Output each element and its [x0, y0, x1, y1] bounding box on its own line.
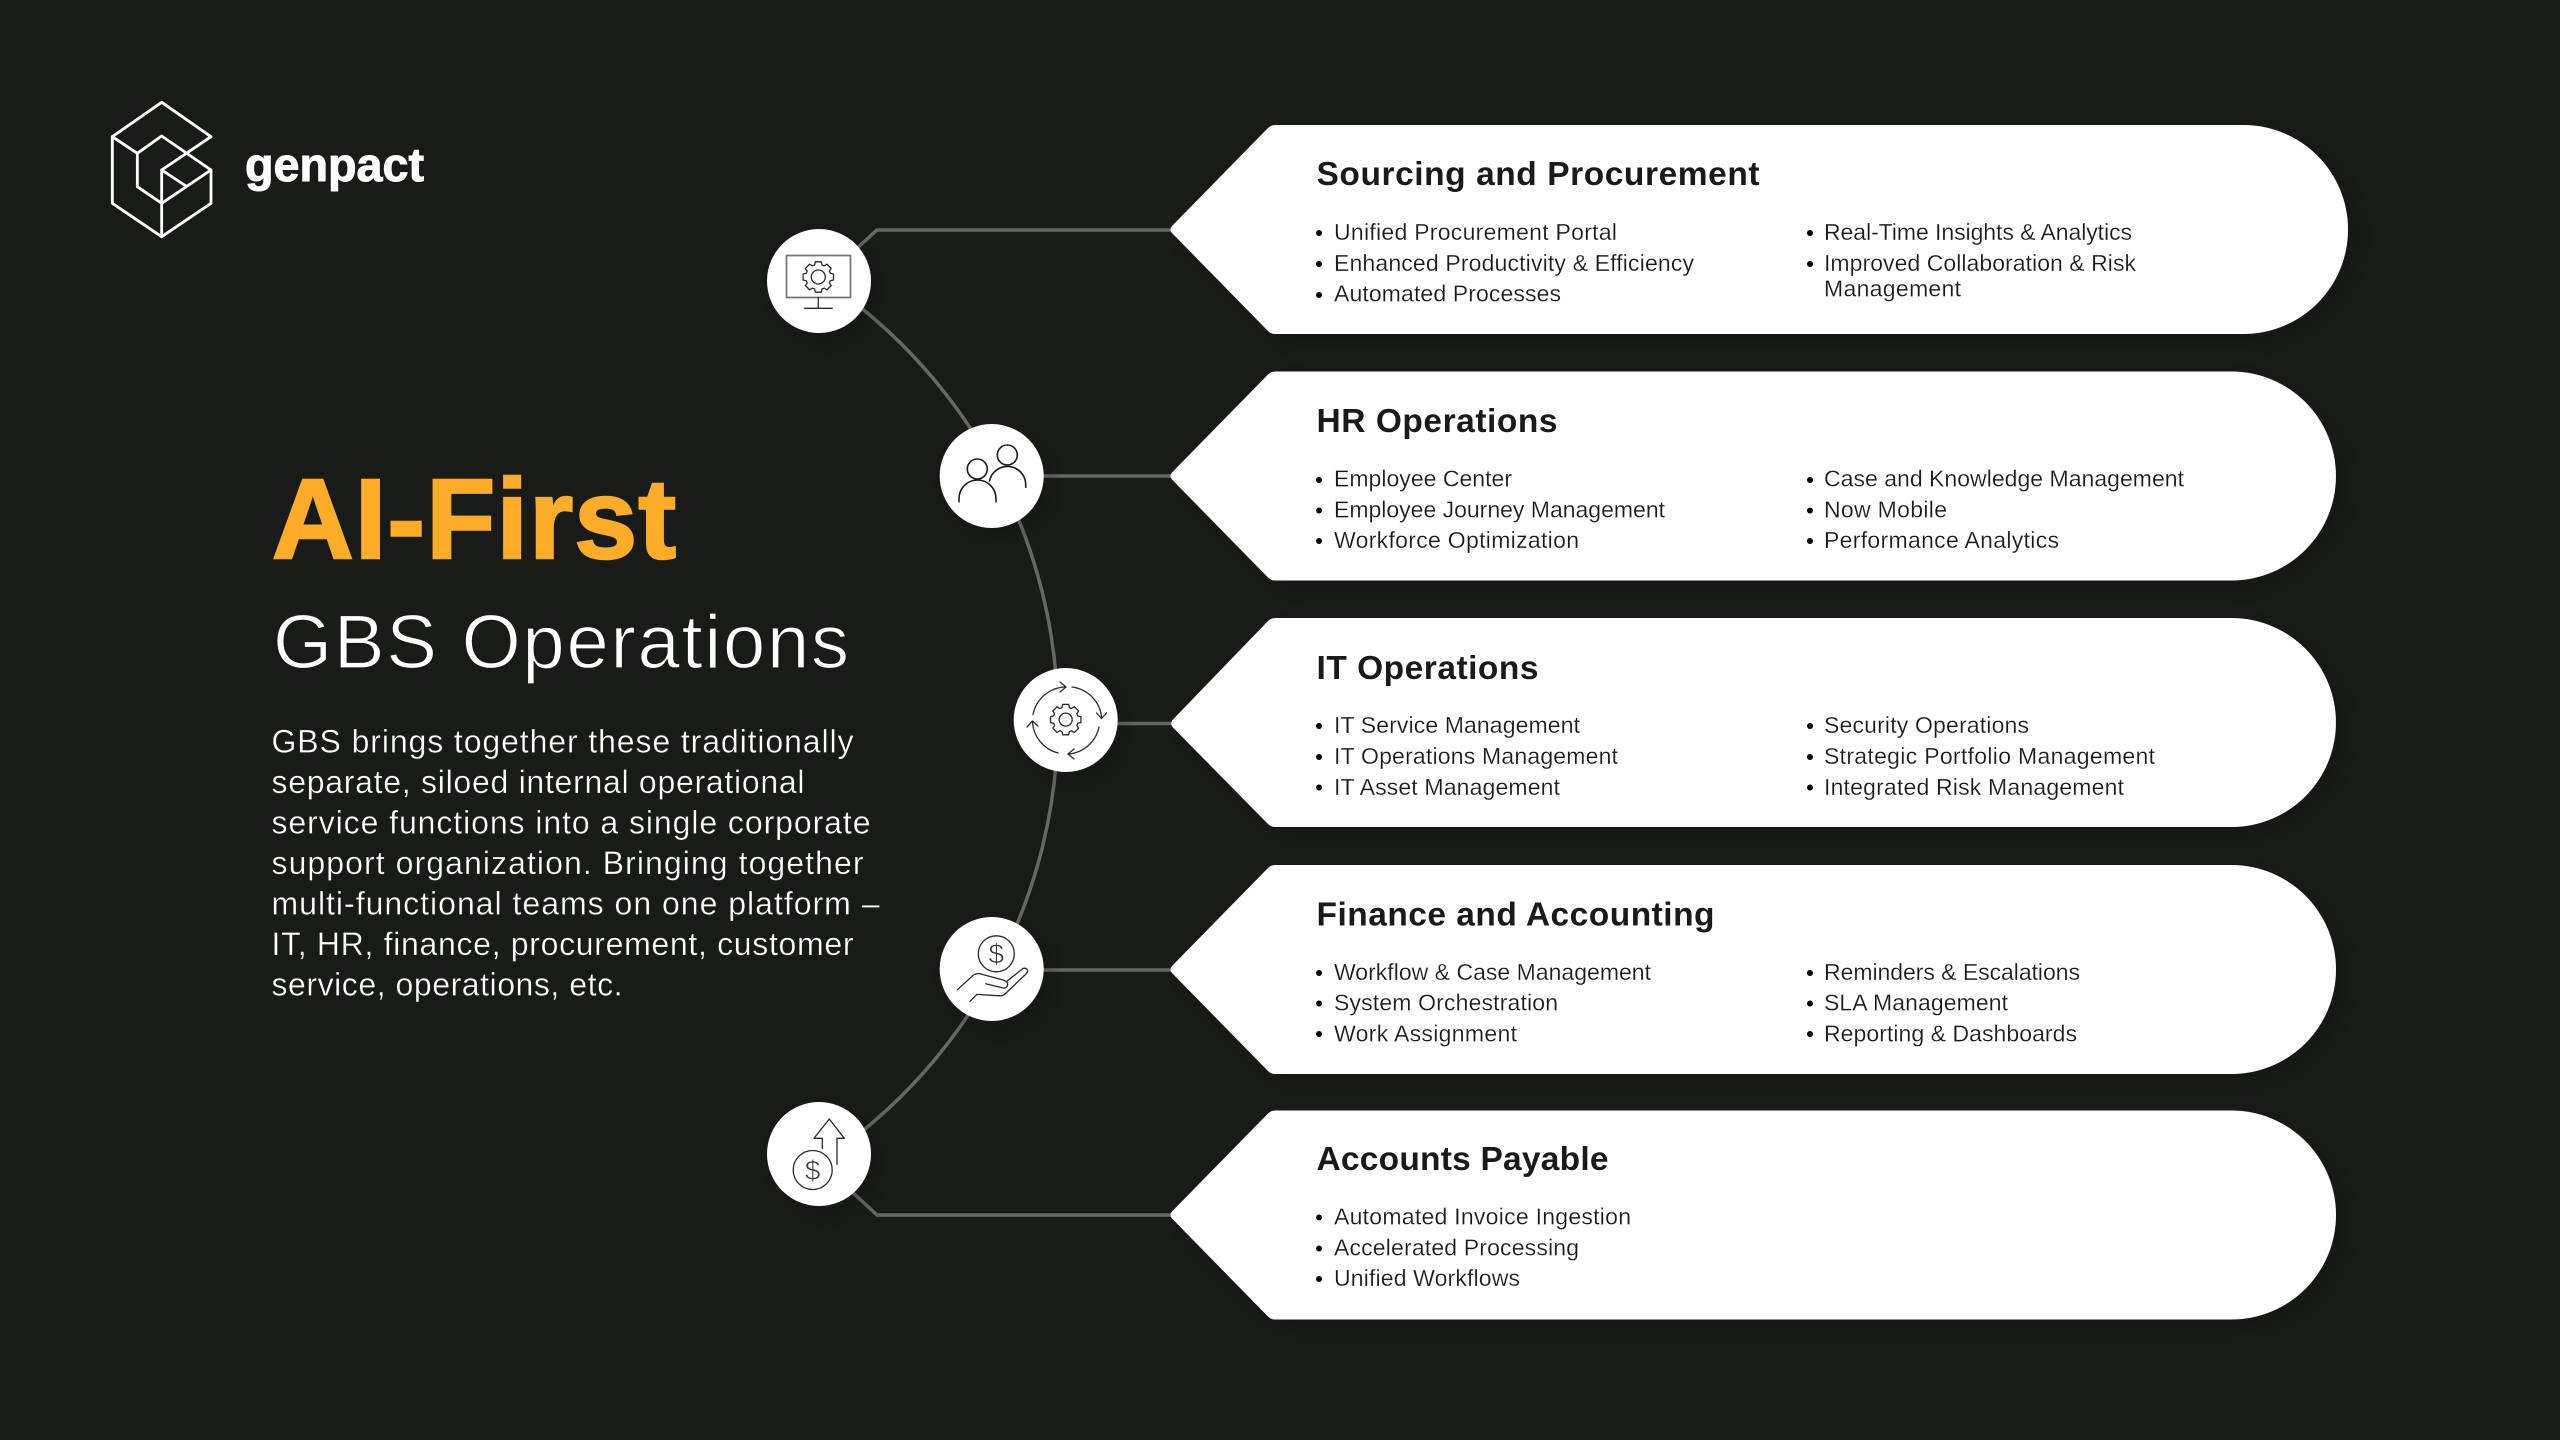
icon: monitor with gear — [786, 256, 850, 308]
list: right column: Now Mobile — [1824, 496, 1947, 522]
heading: GBS Operations: GBS Operations — [273, 600, 849, 685]
list: right column: Real-Time Insights & Analytics — [1824, 219, 2132, 245]
panel: Sourcing and Procurement — [1170, 125, 2348, 334]
list: right column: Reporting & Dashboards — [1824, 1020, 2077, 1046]
list: left column: Unified Workflows — [1334, 1265, 1520, 1291]
node: sourcing icon — [767, 229, 871, 333]
list: left column: IT Operations Management — [1334, 743, 1619, 769]
text block: description: service functions into a single corporate — [272, 804, 870, 840]
panel: IT Operations — [1171, 618, 2336, 827]
list: right column — [1807, 712, 2156, 800]
list: left column — [1316, 219, 1694, 306]
node: HR icon — [940, 424, 1044, 528]
panel heading: Sourcing and Procurement — [1316, 156, 1760, 193]
list: left column: Automated Processes — [1334, 280, 1561, 306]
list: right column: Improved Collaboration & Risk — [1824, 250, 2136, 276]
text block: description: separate, siloed internal operational — [272, 764, 804, 800]
panel heading: Finance and Accounting — [1316, 896, 1714, 934]
icon: gear in cycle arrows — [1027, 682, 1106, 759]
text block: description: GBS brings together these traditionally — [272, 724, 854, 760]
list: right column: Security Operations — [1824, 712, 2029, 738]
node: IT icon — [1014, 668, 1118, 772]
text block: description: multi-functional teams on one platform – — [272, 886, 880, 922]
list: right column: Case and Knowledge Management — [1824, 466, 2185, 492]
node: finance icon — [940, 917, 1044, 1021]
connector lines — [850, 230, 1172, 1215]
text block: description: support organization. Bringing together — [272, 845, 864, 881]
list: right column: Integrated Risk Management — [1824, 774, 2125, 800]
text block: description: service, operations, etc. — [272, 966, 622, 1002]
icon: two people — [959, 445, 1026, 502]
panel: HR Operations — [1170, 372, 2336, 580]
list: left column: Employee Journey Management — [1334, 496, 1666, 522]
icon: coin with up arrow: $ — [805, 1155, 821, 1186]
list: left column: IT Asset Management — [1334, 774, 1561, 800]
list: left column — [1316, 466, 1666, 553]
text block: description — [272, 724, 880, 1002]
panel heading: Accounts Payable — [1316, 1141, 1608, 1178]
list: right column: Performance Analytics — [1824, 527, 2059, 553]
logo wordmark: genpact — [245, 138, 424, 191]
list: right column: Reminders & Escalations — [1824, 959, 2080, 985]
icon: genpact cube mark — [112, 102, 211, 237]
panel heading: HR Operations — [1316, 403, 1558, 440]
list: left column: Unified Procurement Portal — [1334, 219, 1617, 245]
panel: Accounts Payable — [1170, 1110, 2336, 1320]
list: right column: SLA Management — [1824, 990, 2009, 1016]
list: right column: Strategic Portfolio Management — [1824, 743, 2156, 769]
list: left column: Automated Invoice Ingestion — [1334, 1204, 1631, 1230]
text block: description: IT, HR, finance, procurement, customer — [272, 926, 854, 962]
list: left column: Enhanced Productivity & Efficiency — [1334, 250, 1694, 276]
list: left column: Workforce Optimization — [1334, 527, 1579, 553]
list: left column — [1316, 1204, 1631, 1291]
heading: AI-First: AI-First — [272, 456, 676, 582]
list: right column — [1807, 219, 2136, 302]
list: left column: IT Service Management — [1334, 712, 1581, 738]
node: accounts payable icon — [767, 1102, 871, 1206]
list: left column: Workflow & Case Management — [1334, 959, 1652, 985]
list: right column: Management — [1824, 276, 1962, 302]
list: left column: Accelerated Processing — [1334, 1234, 1579, 1260]
panel: Finance and Accounting — [1170, 865, 2336, 1074]
list: left column: System Orchestration — [1334, 990, 1558, 1016]
panel heading: IT Operations — [1316, 650, 1538, 687]
list: right column — [1807, 959, 2080, 1046]
list: left column — [1316, 959, 1652, 1046]
list: right column — [1807, 466, 2185, 553]
list: left column — [1316, 712, 1619, 800]
list: left column: Employee Center — [1334, 466, 1512, 492]
logo: genpact — [112, 102, 424, 237]
list: left column: Work Assignment — [1334, 1020, 1518, 1046]
icon: hand holding coin: $ — [989, 938, 1005, 970]
